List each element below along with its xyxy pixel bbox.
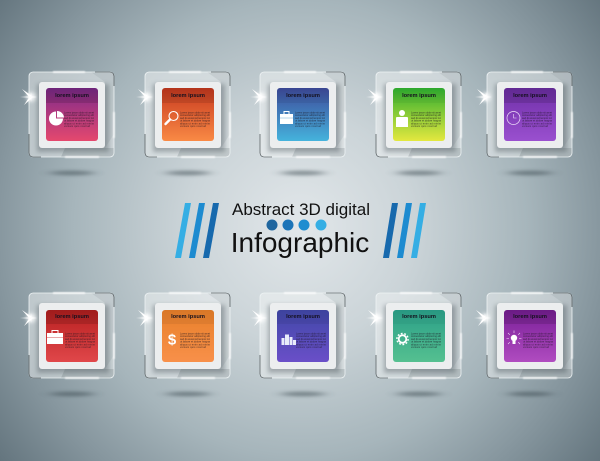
card 6: briefcase	[20, 293, 114, 396]
card 7: dollar	[136, 293, 230, 396]
card 8: buildings	[250, 293, 345, 396]
icon: magnifier	[166, 112, 178, 124]
card 6: briefcase: ut labore et dolore magna	[65, 340, 96, 344]
card 10: light bulb: sed do eiusmod tempor inc	[523, 337, 554, 341]
card 6: briefcase: Lorem ipsum dolor sit amet	[65, 332, 95, 336]
card 1: pie chart: ut labore et dolore magna	[64, 119, 95, 123]
card 8: buildings: sed do eiusmod tempor inc	[296, 337, 327, 341]
card 4: person: aliqua ut enim ad minim	[411, 121, 441, 125]
card 10: light bulb: aliqua ut enim ad minim	[523, 342, 553, 346]
card 5: clock: lorem ipsum	[513, 93, 547, 99]
icon: clock	[507, 112, 520, 124]
card 5: clock: aliqua ut enim ad minim	[522, 121, 552, 125]
card 7: dollar: lorem ipsum	[171, 314, 205, 320]
card 9: gear: lorem ipsum	[402, 314, 436, 320]
card 4: person: Lorem ipsum dolor sit amet	[411, 110, 441, 114]
card 4: person: sed do eiusmod tempor inc	[411, 116, 442, 120]
card 3: briefcase: ut labore et dolore magna	[295, 119, 326, 123]
card 2: magnifier	[136, 72, 230, 176]
card 9: gear	[366, 293, 461, 396]
card 1: pie chart: aliqua ut enim ad minim	[64, 121, 94, 125]
card 5: clock: sed do eiusmod tempor inc	[522, 116, 553, 120]
card 4: person	[366, 72, 461, 176]
card 9: gear: veniam quis nostrud	[411, 345, 438, 349]
card 7: dollar: ut labore et dolore magna	[180, 340, 211, 344]
card 6: briefcase: sed do eiusmod tempor inc	[65, 337, 96, 341]
card 1: pie chart	[20, 72, 114, 176]
card 5: clock	[475, 72, 572, 176]
card 2: magnifier: sed do eiusmod tempor inc	[180, 116, 211, 120]
card 2: magnifier: lorem ipsum	[171, 93, 205, 99]
icon: briefcase	[280, 112, 293, 124]
card 8: buildings: Lorem ipsum dolor sit amet	[296, 332, 326, 336]
card 6: briefcase: consectetur adipiscing elit	[65, 334, 95, 338]
icon: briefcase	[47, 330, 63, 344]
card 4: person: veniam quis nostrud	[411, 124, 438, 128]
card 5: clock: Lorem ipsum dolor sit amet	[522, 110, 552, 114]
right slashes	[383, 203, 426, 258]
card 7: dollar: aliqua ut enim ad minim	[180, 342, 210, 346]
card 3: briefcase: lorem ipsum	[286, 93, 320, 99]
card 9: gear: Lorem ipsum dolor sit amet	[411, 332, 441, 336]
icon: light bulb	[506, 330, 522, 344]
card 8: buildings: ut labore et dolore magna	[296, 340, 327, 344]
card 10: light bulb: veniam quis nostrud	[523, 345, 550, 349]
card 3: briefcase: consectetur adipiscing elit	[295, 113, 325, 117]
card 10: light bulb: Lorem ipsum dolor sit amet	[523, 332, 553, 336]
card 10: light bulb: consectetur adipiscing elit	[523, 334, 553, 338]
card 7: dollar: consectetur adipiscing elit	[180, 334, 210, 338]
card 7: dollar: sed do eiusmod tempor inc	[180, 337, 211, 341]
heading: Infographic: Infographic	[231, 227, 369, 258]
card 6: briefcase: aliqua ut enim ad minim	[65, 342, 95, 346]
card 1: pie chart: veniam quis nostrud	[64, 124, 91, 128]
card 2: magnifier: ut labore et dolore magna	[180, 119, 211, 123]
card 1: pie chart: consectetur adipiscing elit	[64, 113, 94, 117]
left slashes	[175, 203, 219, 258]
icon: person	[396, 110, 408, 127]
card 10: light bulb: lorem ipsum	[513, 314, 547, 320]
card 5: clock: veniam quis nostrud	[522, 124, 549, 128]
card 3: briefcase: veniam quis nostrud	[295, 124, 322, 128]
card 7: dollar: veniam quis nostrud	[180, 345, 207, 349]
card 5: clock: ut labore et dolore magna	[522, 119, 553, 123]
card 6: briefcase: veniam quis nostrud	[65, 345, 92, 349]
card 8: buildings: veniam quis nostrud	[296, 345, 323, 349]
icon: buildings	[282, 334, 296, 345]
card 9: gear: sed do eiusmod tempor inc	[411, 337, 442, 341]
card 4: person: lorem ipsum	[402, 93, 436, 99]
card 3: briefcase: aliqua ut enim ad minim	[295, 121, 325, 125]
card 4: person: consectetur adipiscing elit	[411, 113, 441, 117]
card 9: gear: aliqua ut enim ad minim	[411, 342, 441, 346]
card 10: light bulb: ut labore et dolore magna	[523, 340, 554, 344]
card 3: briefcase: Lorem ipsum dolor sit amet	[295, 110, 325, 114]
icon: gear	[397, 333, 408, 345]
four dots	[266, 220, 326, 230]
card 1: pie chart: sed do eiusmod tempor inc	[64, 116, 95, 120]
card 8: buildings: aliqua ut enim ad minim	[296, 342, 326, 346]
card 1: pie chart: Lorem ipsum dolor sit amet	[64, 110, 94, 114]
card 2: magnifier: aliqua ut enim ad minim	[180, 121, 210, 125]
card 2: magnifier: veniam quis nostrud	[180, 124, 207, 128]
card 7: dollar: Lorem ipsum dolor sit amet	[180, 332, 210, 336]
icon: dollar: $	[168, 332, 177, 348]
card 8: buildings: consectetur adipiscing elit	[296, 334, 326, 338]
card 2: magnifier: consectetur adipiscing elit	[180, 113, 210, 117]
card 8: buildings: lorem ipsum	[286, 314, 320, 320]
card 5: clock: consectetur adipiscing elit	[522, 113, 552, 117]
card 3: briefcase: sed do eiusmod tempor inc	[295, 116, 326, 120]
card 10: light bulb	[474, 293, 572, 396]
card 2: magnifier: Lorem ipsum dolor sit amet	[180, 110, 210, 114]
heading: Abstract 3D digital: Abstract 3D digital	[232, 200, 370, 219]
card 3: briefcase	[250, 72, 345, 176]
card 9: gear: consectetur adipiscing elit	[411, 334, 441, 338]
card 4: person: ut labore et dolore magna	[411, 119, 442, 123]
card 1: pie chart: lorem ipsum	[55, 93, 89, 99]
icon: pie chart	[49, 111, 64, 126]
card 6: briefcase: lorem ipsum	[55, 314, 89, 320]
card 9: gear: ut labore et dolore magna	[411, 340, 442, 344]
